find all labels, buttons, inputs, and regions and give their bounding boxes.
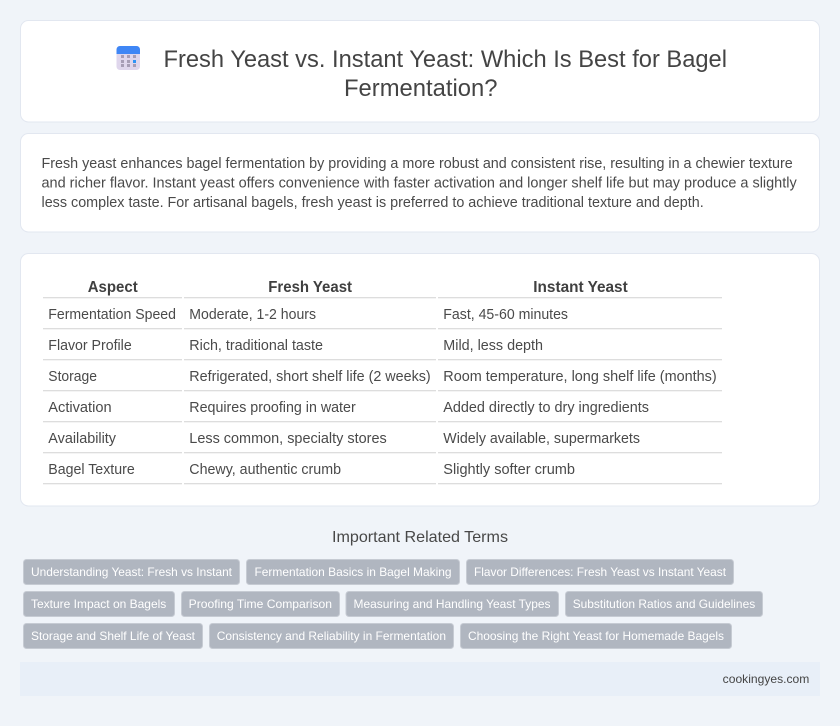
tag [566, 592, 762, 616]
summary text [42, 156, 798, 211]
tag: Measuring and Handling Yeast Types [354, 597, 550, 611]
tag: Fermentation Basics in Bagel Making [254, 565, 452, 579]
related term tags [24, 560, 762, 648]
table header row: Aspect [88, 279, 138, 296]
row: availability: Less common, specialty stores [189, 431, 387, 447]
row: bagel texture [43, 462, 722, 484]
tag [24, 560, 240, 584]
row: bagel texture: Slightly softer crumb [443, 462, 575, 478]
panel: header [20, 20, 820, 122]
row: flavor profile: Flavor Profile [48, 338, 132, 354]
row: fermentation speed: Fast, 45-60 minutes [443, 307, 568, 323]
row: activation: Added directly to dry ingredients [443, 400, 649, 416]
heading: important related terms: Important Related Terms [332, 529, 508, 546]
tag: Storage and Shelf Life of Yeast [31, 629, 196, 643]
row: flavor profile: Mild, less depth [443, 338, 543, 354]
row: activation [43, 400, 722, 422]
tag: Proofing Time Comparison [189, 597, 332, 611]
row: availability: Widely available, supermarkets [443, 431, 640, 447]
tag [24, 624, 202, 648]
title: Fresh Yeast vs. Instant Yeast: Which Is Best for Bagel [164, 46, 727, 73]
tag [182, 592, 340, 616]
row: fermentation speed [43, 307, 722, 329]
row: flavor profile: Rich, traditional taste [189, 338, 323, 354]
tag [246, 560, 460, 584]
row: storage [43, 369, 722, 391]
tag: Choosing the Right Yeast for Homemade Bagels [468, 629, 724, 643]
row: availability: Availability [48, 431, 117, 447]
tag [466, 560, 734, 584]
row: flavor profile [43, 338, 722, 360]
summary text: and richer flavor. Instant yeast offers convenience with faster activation and longer shelf life but may produce a slightly [42, 176, 798, 192]
table header row: Fresh Yeast [268, 279, 353, 296]
tag: Texture Impact on Bagels [31, 597, 166, 611]
tag: Consistency and Reliability in Fermentation [217, 629, 446, 643]
tag: Flavor Differences: Fresh Yeast vs Instant Yeast [474, 565, 727, 579]
table header row: Instant Yeast [533, 279, 628, 296]
table header row [43, 279, 722, 298]
row: storage: Refrigerated, short shelf life (2 weeks) [189, 369, 431, 385]
row: availability [43, 431, 722, 453]
tag [210, 624, 454, 648]
row: activation: Requires proofing in water [189, 400, 356, 416]
tag [24, 592, 174, 616]
footer: cookingyes.com [723, 672, 809, 686]
title: Fermentation? [344, 75, 498, 102]
tag: Substitution Ratios and Guidelines [573, 597, 755, 611]
row: fermentation speed: Moderate, 1-2 hours [189, 307, 316, 323]
footer [20, 662, 820, 696]
row: fermentation speed: Fermentation Speed [48, 307, 176, 323]
row: storage: Room temperature, long shelf life (months) [443, 369, 717, 385]
tag: Understanding Yeast: Fresh vs Instant [31, 565, 233, 579]
row: activation: Activation [48, 400, 112, 416]
row: storage: Storage [48, 369, 97, 385]
icon: calendar [116, 46, 140, 70]
summary text: Fresh yeast enhances bagel fermentation by providing a more robust and consistent rise, resulting in a chewier texture [42, 156, 793, 172]
panel: comparison table [20, 254, 820, 506]
row: bagel texture: Bagel Texture [48, 462, 135, 478]
row: bagel texture: Chewy, authentic crumb [189, 462, 341, 478]
summary text: less complex taste. For artisanal bagels, fresh yeast is preferred to achieve traditional texture and depth. [42, 195, 704, 211]
tag [346, 592, 558, 616]
tag [460, 624, 732, 648]
title [164, 46, 727, 102]
panel: summary [20, 134, 820, 232]
